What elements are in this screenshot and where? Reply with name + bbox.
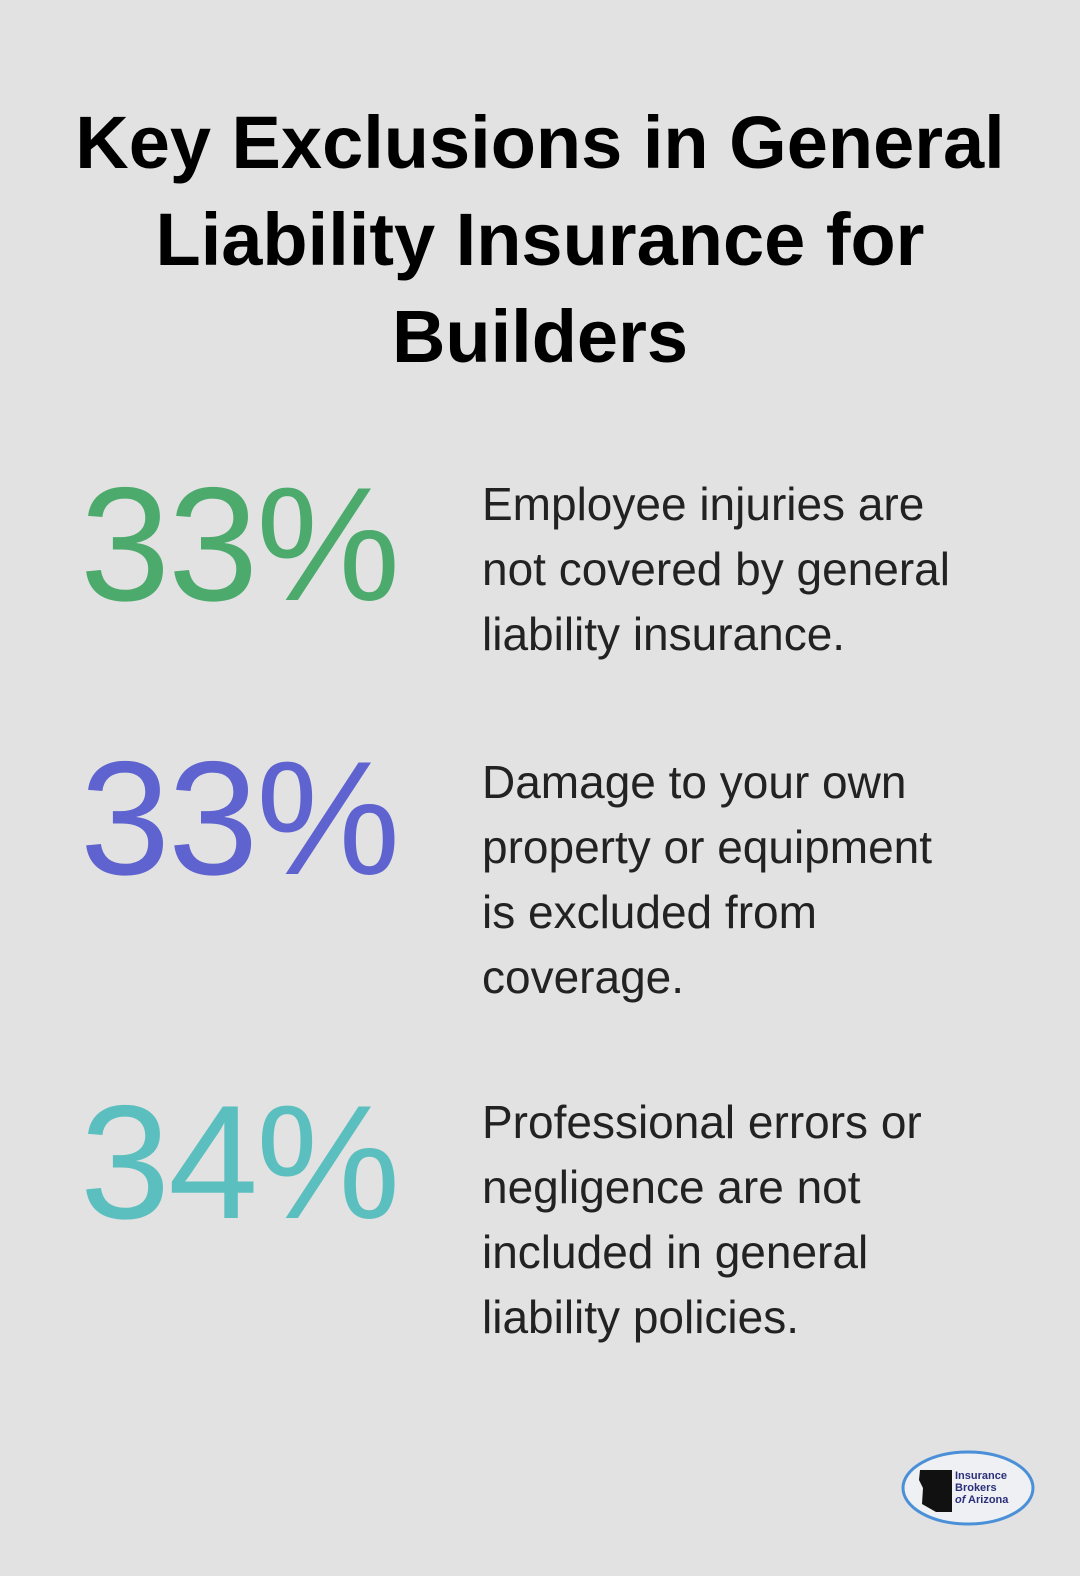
stat 2 text: property or equipment	[482, 821, 932, 873]
stat 3 text: included in general	[482, 1226, 868, 1278]
stat 3 text: negligence are not	[482, 1161, 861, 1213]
title: Key Exclusions in General	[75, 101, 1005, 184]
stat 1 text: not covered by general	[482, 543, 950, 595]
stat 2 text	[482, 756, 932, 1003]
stat 3 text: Professional errors or	[482, 1096, 922, 1148]
stat 1 text: liability insurance.	[482, 608, 845, 660]
stat 3 text	[482, 1096, 922, 1343]
title	[75, 101, 1005, 378]
stat 3 number: 34%	[80, 1072, 398, 1253]
logo: of Arizona	[955, 1494, 1009, 1506]
stat 1 text	[482, 478, 950, 660]
title: Builders	[392, 295, 688, 378]
logo: Brokers	[955, 1482, 997, 1494]
stat 2 text: is excluded from	[482, 886, 817, 938]
title: Liability Insurance for	[156, 198, 924, 281]
stat 3 text: liability policies.	[482, 1291, 799, 1343]
stat 1 number: 33%	[80, 454, 398, 635]
stat 2 number: 33%	[80, 728, 398, 909]
stat 2 text: coverage.	[482, 951, 684, 1003]
logo	[902, 1450, 1034, 1526]
stat 2 text: Damage to your own	[482, 756, 906, 808]
logo: Insurance	[955, 1470, 1007, 1482]
stat 1 text: Employee injuries are	[482, 478, 924, 530]
